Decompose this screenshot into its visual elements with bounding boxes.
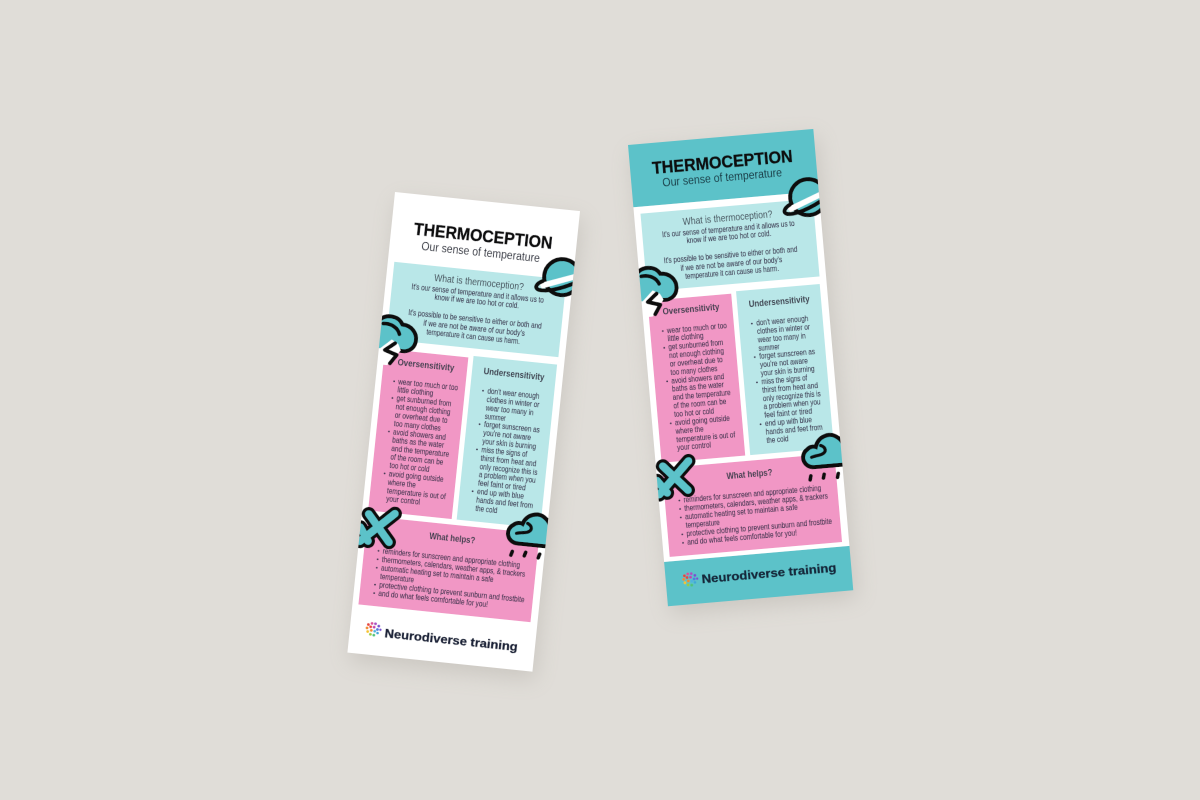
panel: what helps: and do what feels comfortable for you! — [378, 589, 488, 609]
panel: what is thermoception: know if we are too hot or cold. — [686, 229, 772, 245]
panel: undersensitivity: a problem when you — [478, 470, 536, 485]
panel: what is thermoception: know if we are too hot or cold. — [434, 293, 519, 311]
title: THERMOCEPTION — [651, 146, 793, 178]
panel: what is thermoception — [386, 262, 566, 357]
panel: teal bookmark card — [624, 128, 861, 615]
panel: what helps: and do what feels comfortable for you! — [687, 528, 797, 547]
panel: undersensitivity: Undersensitivity — [483, 366, 546, 383]
panel: undersensitivity: thirst from heat and — [480, 454, 537, 468]
panel: what helps: reminders for sunscreen and appropriate clothing — [683, 484, 822, 505]
panel: what helps: What helps? — [726, 467, 773, 481]
panel: undersensitivity: clothes in winter or — [486, 395, 540, 409]
panel: oversensitivity: Oversensitivity — [662, 302, 721, 317]
panel: what helps: protective clothing to prevent sunburn and frostbite — [686, 517, 833, 538]
panel: undersensitivity: your skin is burning — [760, 364, 815, 378]
panel: undersensitivity: feel faint or tired — [764, 407, 813, 420]
panel: what helps: thermometers, calendars, weather apps, & trackers — [381, 555, 526, 579]
panel: what helps: automatic heating set to maintain a safe — [685, 503, 799, 521]
footer band — [664, 546, 853, 606]
panel: what is thermoception: It's our sense of temperature and it allows us to — [662, 219, 795, 239]
card contents — [624, 128, 860, 607]
panel: oversensitivity: baths as the water — [392, 436, 445, 450]
title: THERMOCEPTION — [413, 219, 553, 253]
subtitle: Our sense of temperature — [662, 167, 783, 190]
panel: oversensitivity — [368, 349, 468, 519]
panel: undersensitivity: end up with blue — [477, 487, 525, 501]
panel: oversensitivity: your control — [677, 441, 712, 453]
panel: what helps: reminders for sunscreen and appropriate clothing — [382, 547, 521, 570]
icon: rain cloud — [801, 434, 847, 480]
panel: what is thermoception: What is thermoception? — [682, 209, 773, 228]
panel: undersensitivity: miss the signs of — [761, 373, 808, 386]
panel: oversensitivity: temperature is out of — [387, 486, 447, 501]
panel: what helps: automatic heating set to maintain a safe — [381, 564, 494, 584]
icon: planet — [536, 257, 582, 297]
panel: oversensitivity: too hot or cold — [389, 461, 430, 474]
panel: what helps: temperature — [685, 518, 721, 530]
panel: oversensitivity: and the temperature — [672, 388, 731, 402]
panel: what is thermoception: temperature it can cause us harm. — [426, 327, 520, 346]
panel: oversensitivity: avoid showers and — [671, 372, 725, 385]
panel: oversensitivity: not enough clothing — [669, 347, 724, 360]
panel: oversensitivity: get sunburned from — [396, 394, 452, 409]
subtitle: Our sense of temperature — [421, 241, 540, 265]
panel: what is thermoception: What is thermoception? — [434, 273, 525, 293]
panel: what helps: thermometers, calendars, weather apps, & trackers — [684, 492, 828, 513]
panel: undersensitivity: summer — [484, 412, 507, 423]
panel: undersensitivity: thirst from heat and — [762, 381, 818, 395]
panel: oversensitivity: or overheat due to — [394, 411, 449, 425]
panel: oversensitivity: get sunburned from — [668, 338, 724, 352]
panel: undersensitivity: forget sunscreen as — [759, 347, 815, 361]
panel: undersensitivity: don't wear enough — [487, 387, 540, 401]
panel: undersensitivity: miss the signs of — [481, 445, 528, 459]
panel: what is thermoception: temperature it can cause us harm. — [685, 264, 779, 281]
panel: oversensitivity: too many clothes — [394, 419, 441, 433]
panel: undersensitivity: summer — [758, 342, 780, 353]
panel: undersensitivity: your skin is burning — [482, 437, 537, 451]
panel: what is thermoception: It's our sense of temperature and it allows us to — [411, 282, 545, 305]
icon: airplane — [359, 510, 395, 545]
panel: oversensitivity: little clothing — [667, 331, 704, 343]
panel: undersensitivity: don't wear enough — [756, 314, 809, 328]
panel: oversensitivity: not enough clothing — [395, 402, 451, 417]
panel: undersensitivity: you're not aware — [483, 428, 532, 442]
panel: what helps — [358, 516, 540, 622]
panel: oversensitivity: wear too much or too — [397, 377, 459, 392]
panel: white bookmark card — [343, 192, 587, 680]
panel: what helps — [662, 453, 842, 557]
panel: oversensitivity: temperature is out of — [676, 430, 736, 444]
logo: neurodiverse training: Neurodiverse training — [701, 563, 837, 586]
panel: oversensitivity: avoid going outside — [675, 414, 731, 427]
card contents — [343, 192, 587, 672]
icon: storm cloud with lightning — [638, 266, 679, 317]
panel: oversensitivity — [648, 294, 745, 463]
icon: storm cloud with lightning — [378, 314, 418, 366]
icon: planet — [782, 177, 821, 218]
panel: oversensitivity: avoid going outside — [388, 469, 444, 484]
panel: oversensitivity: and the temperature — [391, 444, 450, 459]
panel: oversensitivity: too many clothes — [670, 364, 718, 377]
panel: oversensitivity: little clothing — [397, 386, 434, 398]
panel: undersensitivity: you're not aware — [760, 356, 809, 370]
logo: neurodiverse training: Neurodiverse training — [384, 628, 518, 654]
panel: oversensitivity: avoid showers and — [393, 427, 446, 442]
panel: undersensitivity: end up with blue — [765, 415, 813, 428]
card shadow — [632, 137, 857, 614]
panel: what is thermoception: It's possible to be sensitive to either or both and — [663, 245, 798, 265]
panel: undersensitivity: feel faint or tired — [478, 479, 526, 493]
panel: oversensitivity: of the room can be — [390, 453, 444, 467]
panel: oversensitivity: Oversensitivity — [397, 357, 456, 373]
panel: oversensitivity: or overheat due to — [669, 355, 724, 369]
panel: what helps: protective clothing to prevent sunburn and frostbite — [379, 580, 526, 605]
panel: undersensitivity: only recognize this is — [762, 389, 821, 403]
panel: undersensitivity: forget sunscreen as — [484, 420, 540, 435]
panel: undersensitivity: hands and feet from — [476, 496, 534, 510]
panel: undersensitivity — [736, 284, 834, 455]
panel: undersensitivity: Undersensitivity — [748, 294, 811, 309]
panel: what is thermoception: if we are not be aware of our body's — [423, 319, 525, 338]
panel: oversensitivity: too hot or cold — [674, 407, 714, 419]
panel: what helps: What helps? — [429, 531, 476, 546]
panel: oversensitivity: where the — [674, 424, 704, 436]
logo: neurodiverse training — [365, 621, 519, 654]
panel: what is thermoception: It's possible to be sensitive to either or both and — [408, 308, 542, 331]
panel: oversensitivity: your control — [386, 494, 421, 507]
panel: what is thermoception — [640, 199, 820, 291]
panel: oversensitivity: wear too much or too — [666, 321, 728, 335]
panel: undersensitivity: the cold — [475, 504, 498, 515]
panel: what helps: temperature — [380, 572, 415, 585]
card shadow — [350, 200, 582, 680]
panel: undersensitivity: a problem when you — [763, 398, 821, 411]
panel: oversensitivity: baths as the water — [672, 380, 725, 394]
panel: undersensitivity: wear too many in — [757, 331, 806, 344]
panel: undersensitivity: wear too many in — [485, 403, 534, 417]
header band — [628, 129, 819, 207]
panel: undersensitivity: clothes in winter or — [757, 322, 811, 336]
panel: undersensitivity: hands and feet from — [765, 423, 823, 437]
panel: oversensitivity: of the room can be — [673, 397, 727, 411]
logo: neurodiverse training — [682, 560, 837, 588]
icon: rain cloud — [506, 512, 553, 559]
panel: undersensitivity — [457, 356, 557, 528]
panel: undersensitivity: only recognize this is — [479, 462, 538, 477]
panel: what is thermoception: if we are not be aware of our body's — [680, 255, 783, 273]
icon: airplane — [656, 461, 691, 495]
panel: undersensitivity: the cold — [766, 434, 789, 445]
panel: oversensitivity: where the — [387, 478, 417, 490]
